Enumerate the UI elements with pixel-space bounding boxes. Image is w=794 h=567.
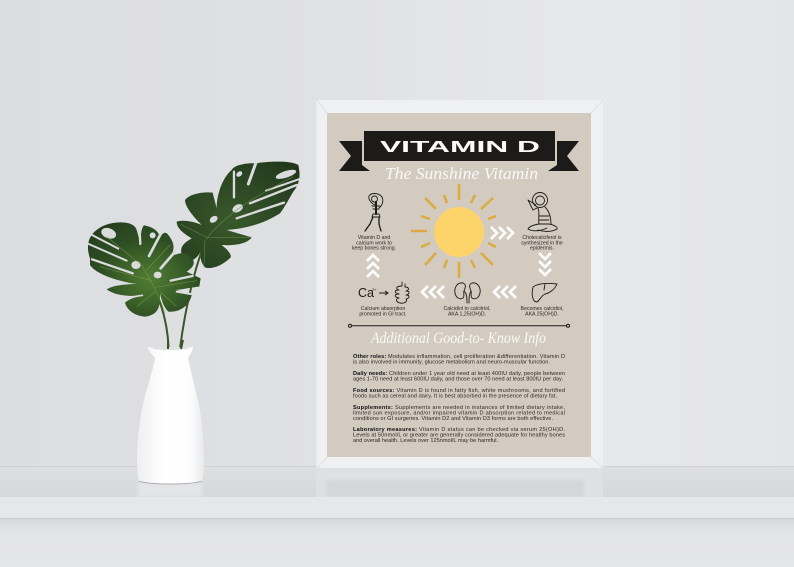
- daily needs: [353, 371, 565, 383]
- caption: cholecalciferol: Cholecalciferol is: [522, 235, 562, 241]
- arrows: down to liver: [539, 253, 551, 275]
- caption: skeleton: calcium work to: [356, 240, 392, 246]
- arrows: liver to kidney: [494, 286, 516, 298]
- icon: skeleton: [365, 194, 383, 231]
- icon: liver: [532, 283, 557, 302]
- section heading: Additional Good-to- Know Info: [370, 330, 546, 347]
- other roles: [353, 354, 565, 366]
- caption: kidney: Calcidiol to calcitriol,: [444, 306, 490, 312]
- stem left: [143, 267, 169, 349]
- caption: calcium: Calcium absorption: [361, 306, 405, 312]
- laboratory measures: and overall health. Levels over 125nmol/L may be harmful.: [353, 438, 498, 444]
- caption: kidney: AKA 1,25(OH)D.: [448, 311, 486, 317]
- text block: details: [353, 354, 565, 444]
- icon: seated woman: [528, 192, 557, 231]
- daily needs: Daily needs: Children under 1 year old need at least 400IU daily, people between: [353, 371, 565, 377]
- caption: skeleton: keep bones strong.: [352, 246, 396, 252]
- arrows: sun to epidermis: [491, 227, 513, 239]
- icon: calcium to intestine: Ca: [358, 286, 374, 300]
- icon: calcium to intestine: [358, 282, 409, 303]
- caption: skeleton: Vitamin D and: [358, 235, 390, 241]
- leaf: right: [177, 162, 302, 268]
- supplements: [353, 405, 565, 422]
- caption: cholecalciferol: synthesized in the: [521, 240, 563, 246]
- plant: monstera leaves: [88, 162, 302, 349]
- poster frame: [316, 100, 603, 468]
- laboratory measures: Laboratory measures: Vitamin D status can be checked via serum 25(OH)D.: [353, 427, 565, 433]
- daily needs: ages 1-70 need at least 600IU daily, and those over 70 need at least 800IU per day.: [353, 377, 563, 383]
- shelf: [0, 466, 794, 567]
- supplements: limited sun exposure, and/or impaired vitamin D absorption related to medical: [353, 410, 565, 416]
- stem right: [180, 235, 208, 349]
- slits right leaf: [234, 163, 302, 218]
- laboratory measures: Levels at 50nmol/L or greater are generally considered adequate for healthy bones: [353, 432, 565, 438]
- food sources: foods such as cereal and dairy. It is best absorbed in the presence of dietary fat.: [353, 393, 557, 399]
- supplements: Supplements: Supplements are needed in instances of limited dietary intake,: [353, 405, 565, 411]
- sun: [411, 184, 496, 278]
- slits left leaf: [89, 226, 193, 298]
- food sources: [353, 388, 565, 399]
- title: VITAMIN D: [380, 139, 540, 156]
- caption: liver: AKA 25(OH)D.: [525, 311, 559, 317]
- other roles: is also involved in immunity, glucose metabolism and neuro-muscular function.: [353, 360, 550, 366]
- caption: calcium: promoted in GI tract.: [359, 311, 407, 317]
- caption: liver: Becomes calcidiol,: [521, 306, 563, 312]
- vase: [137, 340, 204, 484]
- caption: cholecalciferol: epidermis.: [530, 246, 554, 252]
- supplements: conditions or GI surgeries. Vitamin D2 and Vitamin D3 forms are both effective.: [353, 416, 553, 422]
- divider: [348, 324, 570, 327]
- arrows: kidney to gut: [422, 286, 444, 298]
- other roles: Other roles: Modulates inflammation, cell proliferation &differentiation. Vitamin D: [353, 354, 565, 360]
- laboratory measures: [353, 427, 565, 444]
- poster panel: [327, 113, 591, 457]
- leaf: left: [88, 222, 201, 317]
- arrows: up to skeleton: [367, 255, 379, 277]
- icon: kidneys: [455, 283, 480, 303]
- food sources: Food sources: Vitamin D is found in fatty fish, white mushrooms, and fortified: [353, 388, 565, 394]
- title ribbon: [339, 131, 579, 171]
- subtitle: The Sunshine Vitamin: [385, 164, 538, 183]
- icon: calcium to intestine: 2+: [372, 287, 377, 292]
